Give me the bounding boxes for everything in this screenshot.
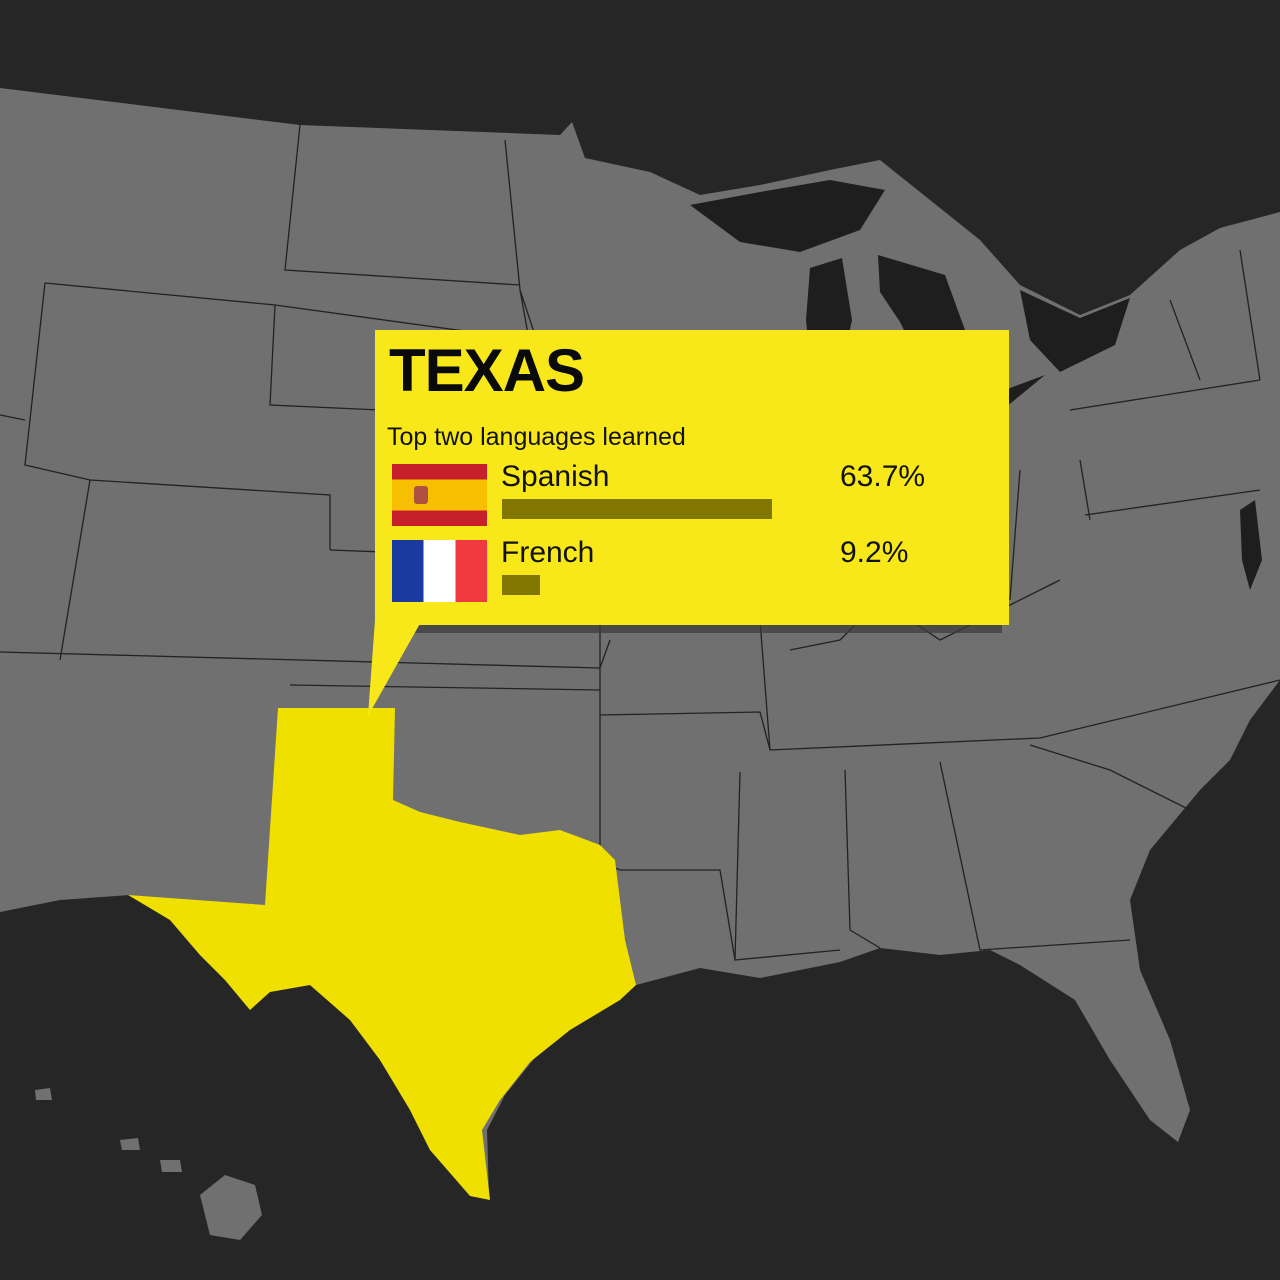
value: spanish: 63.7% [840, 460, 925, 493]
callout: texas languages [375, 330, 1009, 625]
icon: spain flag [392, 464, 487, 526]
callout shadow [410, 340, 1002, 633]
bar: french [502, 575, 540, 595]
value: french: 9.2% [840, 536, 908, 569]
bar: spanish [502, 499, 772, 519]
icon: france flag [392, 540, 487, 602]
great lakes [690, 180, 1262, 590]
hawaii islands [35, 1088, 262, 1240]
subtitle: Top two languages learned [387, 423, 686, 451]
title: TEXAS [389, 337, 584, 404]
label: spanish: Spanish [501, 460, 609, 493]
state borders [0, 125, 1280, 960]
texas highlighted [128, 708, 636, 1200]
callout pointer [368, 620, 422, 716]
label: french: French [501, 536, 594, 569]
